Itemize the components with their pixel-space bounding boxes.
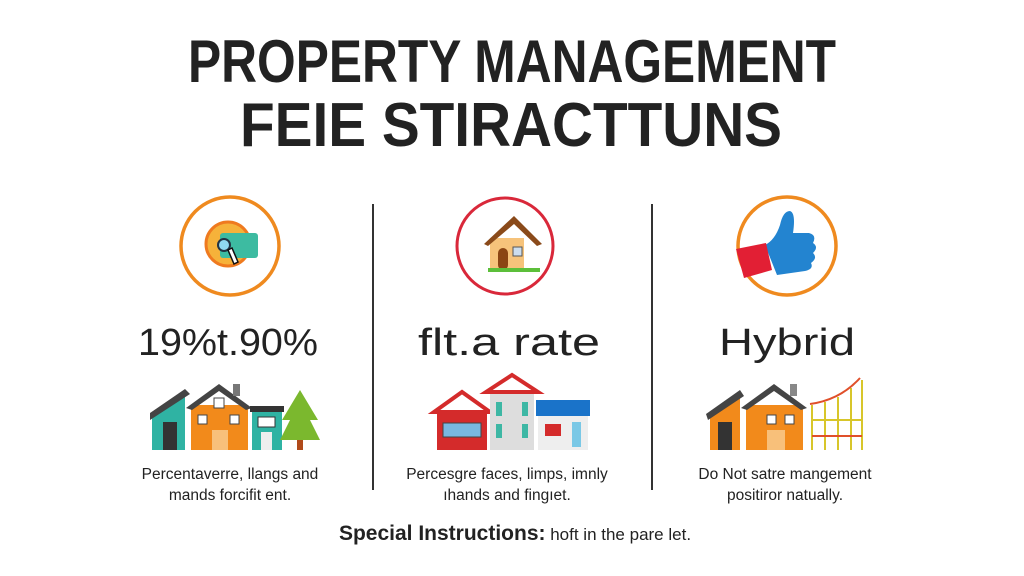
icon: thumbs up [736, 197, 836, 295]
text block [142, 466, 318, 504]
title: FEIE STIRACTTUNS [240, 91, 782, 160]
text block: Do Not satre mangement [698, 466, 872, 483]
text block: Percentaverre, llangs and [142, 466, 318, 483]
special instructions: Special Instructions: hoft in the pare let. [339, 522, 691, 545]
houses and chart illustration [706, 378, 862, 450]
houses illustration [434, 375, 590, 450]
divider left [372, 204, 374, 490]
panel: flat rate [406, 198, 608, 504]
text block [698, 466, 872, 504]
icon: house [457, 198, 553, 294]
text block: Percesgre faces, limps, imnly [406, 466, 608, 483]
heading: 19%t.90%: 19%t.90% [138, 322, 318, 364]
panel: hybrid [698, 197, 872, 504]
heading: Hybrid: Hybrid [719, 322, 855, 364]
heading: flt.a rate: flt.a rate [418, 322, 600, 364]
title [188, 28, 836, 160]
text block: positiror natually. [727, 487, 843, 504]
divider right [651, 204, 653, 490]
title: PROPERTY MANAGEMENT [188, 28, 836, 95]
text block: mands forcifit ent. [169, 487, 291, 504]
houses illustration [150, 384, 320, 450]
text block [406, 466, 608, 504]
text block: ıhands and fingıet. [443, 487, 571, 504]
icon: card with magnifier [181, 197, 279, 295]
panel: percentage [138, 197, 320, 504]
